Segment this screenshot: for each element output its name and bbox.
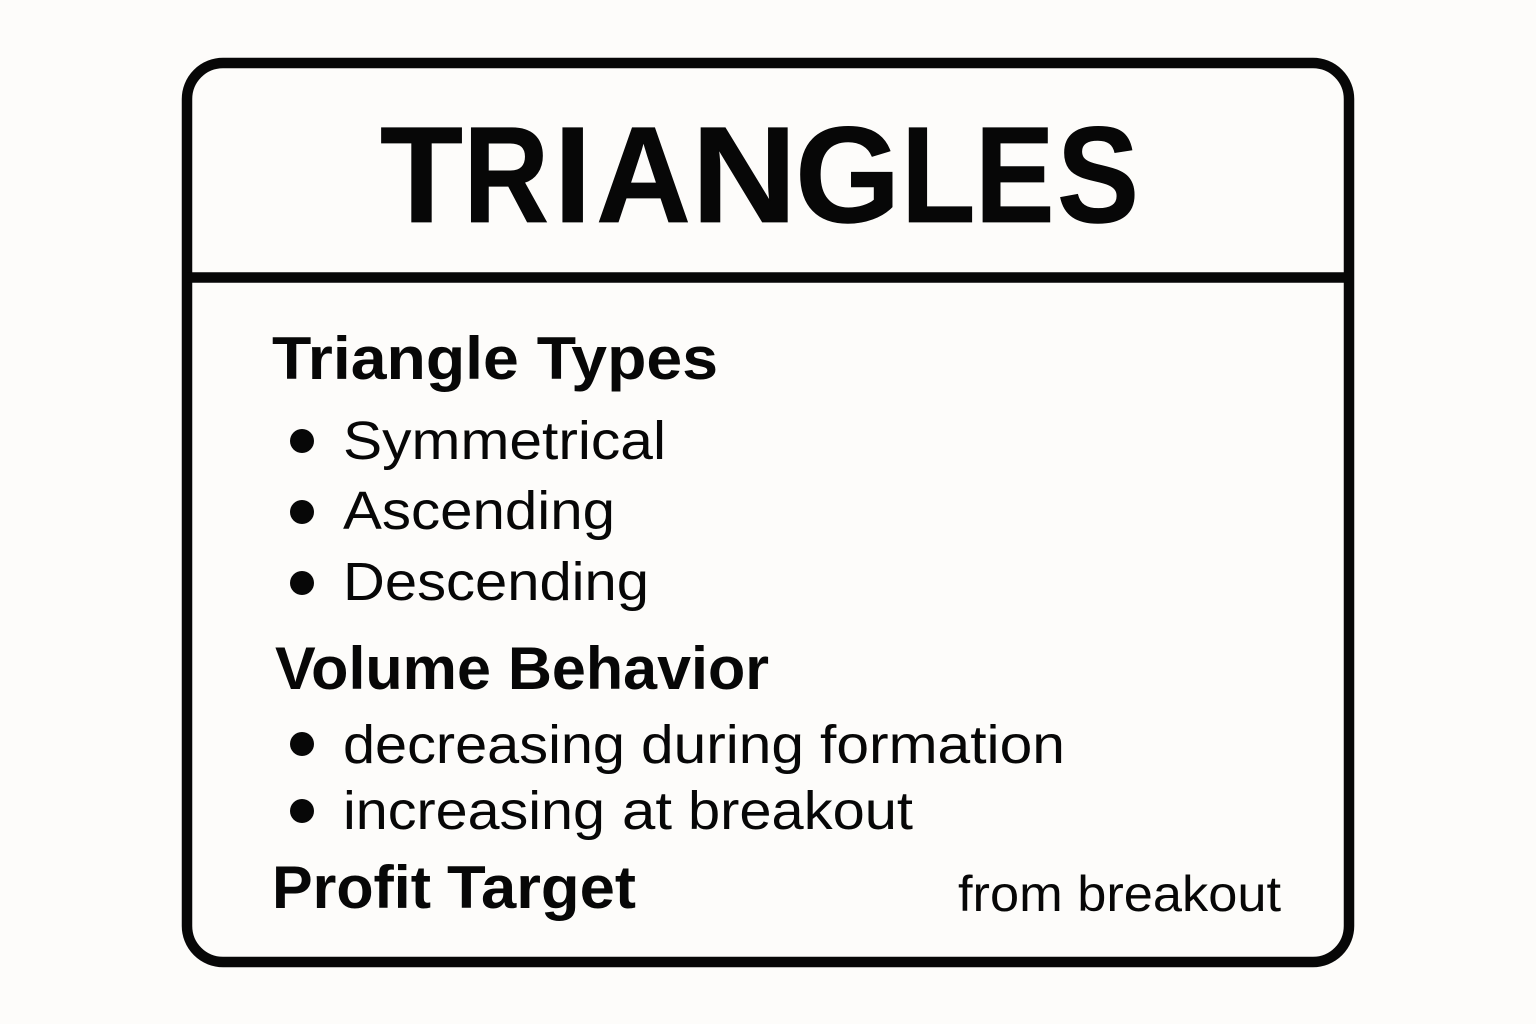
text: decreasing: during bbox=[641, 715, 804, 775]
text: from breakout: from breakout bbox=[958, 866, 1281, 922]
title: E bbox=[975, 99, 1054, 252]
text: symmetrical: Symmetrical bbox=[343, 411, 666, 471]
bullet: decreasing bbox=[290, 732, 314, 756]
list: triangle types bbox=[290, 411, 666, 612]
text: decreasing: decreasing bbox=[343, 715, 625, 775]
panel: triangles card bbox=[187, 63, 1349, 962]
text: increasing: breakout bbox=[688, 781, 913, 841]
text: increasing: at bbox=[622, 781, 672, 841]
text: decreasing: formation bbox=[820, 715, 1065, 775]
bullet: increasing bbox=[290, 799, 314, 823]
text: ascending: Ascending bbox=[343, 481, 615, 541]
title: G bbox=[795, 99, 900, 252]
text: increasing: increasing bbox=[343, 781, 605, 841]
title: S bbox=[1057, 99, 1139, 252]
title: L bbox=[901, 99, 976, 252]
heading: profit target: Target bbox=[447, 854, 636, 921]
bullet: descending bbox=[290, 571, 314, 595]
heading: volume behavior: Volume Behavior bbox=[275, 635, 769, 702]
text: descending: Descending bbox=[343, 552, 649, 612]
bullet: symmetrical bbox=[290, 429, 314, 453]
title: A bbox=[596, 99, 691, 252]
title: I bbox=[554, 99, 592, 252]
bullet: ascending bbox=[290, 500, 314, 524]
list: volume behavior bbox=[290, 715, 1065, 841]
title: R bbox=[463, 99, 549, 252]
heading: profit target: Profit bbox=[272, 854, 431, 921]
title: N bbox=[691, 99, 797, 252]
heading: triangle types: Triangle Types bbox=[272, 325, 718, 392]
title: T bbox=[380, 99, 463, 252]
